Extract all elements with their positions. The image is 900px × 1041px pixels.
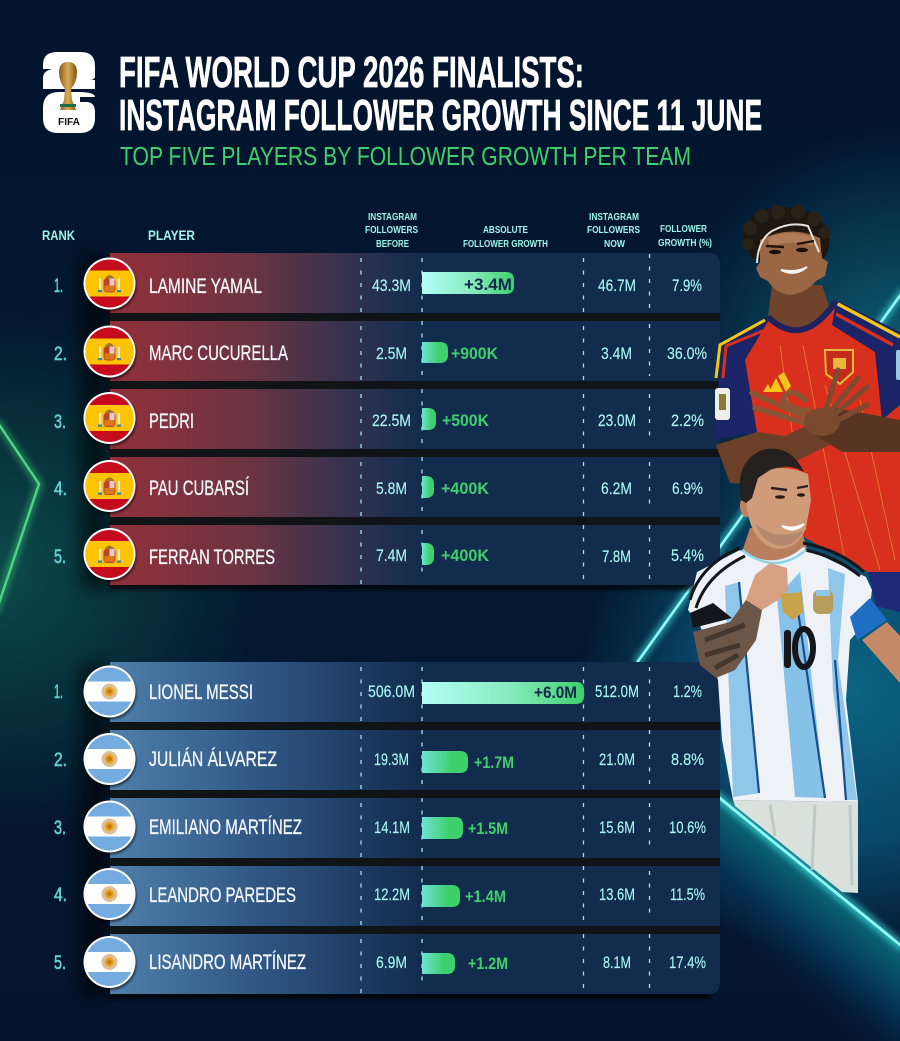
column headers: FOLLOWER [660, 224, 708, 235]
column headers: FOLLOWER GROWTH [463, 239, 548, 250]
row: Lamine Yamal: 1. [54, 275, 63, 297]
row: Lisandro Martínez: 17.4% [669, 953, 706, 972]
row: Leandro Paredes: +1.4M [465, 887, 506, 906]
row: Lisandro Martínez [54, 934, 720, 994]
row: Emiliano Martínez: 14.1M [374, 818, 410, 837]
neon line upper right [636, 290, 900, 664]
row: Leandro Paredes: LEANDRO PAREDES [149, 884, 296, 907]
column headers: NOW [604, 239, 625, 250]
row: Ferran Torres: FERRAN TORRES [149, 546, 275, 569]
row: Julián Álvarez: 2. [54, 749, 67, 771]
row: Pau Cubarsí: PAU CUBARSÍ [149, 477, 249, 500]
row: Lamine Yamal [54, 253, 720, 313]
row: Ferran Torres: 7.8M [602, 547, 631, 566]
row: Lionel Messi: 512.0M [595, 682, 639, 701]
row: Julián Álvarez: 19.3M [374, 750, 409, 769]
row: Pedri: 3. [54, 411, 66, 433]
column headers: INSTAGRAM [368, 212, 417, 223]
row: Lisandro Martínez: 6.9M [376, 953, 407, 972]
row: Ferran Torres: 5. [54, 546, 66, 568]
row: Pedri: 2.2% [671, 411, 704, 430]
column headers [42, 212, 712, 250]
row: Lisandro Martínez: LISANDRO MARTÍNEZ [149, 951, 306, 974]
row: Marc Cucurella: 3.4M [601, 344, 632, 363]
row: Marc Cucurella [54, 321, 720, 381]
player: Lionel Messi [688, 449, 900, 893]
panel: Spain table [54, 253, 720, 590]
row: Lionel Messi: 1. [54, 681, 63, 703]
column headers: FOLLOWERS [587, 225, 640, 236]
row: Lionel Messi: LIONEL MESSI [149, 681, 253, 704]
row: Pedri: 23.0M [598, 411, 636, 430]
row: Julián Álvarez: JULIÁN ÁLVAREZ [149, 748, 277, 771]
row: Pau Cubarsí [54, 457, 720, 517]
row: Julián Álvarez [54, 730, 720, 790]
column headers: PLAYER [148, 228, 195, 243]
row: Lamine Yamal: +3.4M [464, 275, 512, 294]
row: Marc Cucurella: +900K [451, 344, 499, 363]
row: Marc Cucurella: 36.0% [667, 344, 707, 363]
row: Pau Cubarsí: 6.9% [672, 479, 703, 498]
column headers: GROWTH (%) [658, 238, 712, 249]
row: Emiliano Martínez: +1.5M [468, 819, 508, 838]
row: Ferran Torres: 5.4% [671, 546, 704, 565]
row: Ferran Torres [54, 525, 720, 585]
logo: FIFA World Cup 26 [43, 52, 95, 133]
row: Ferran Torres: +400K [441, 546, 490, 565]
row: Emiliano Martínez: 10.6% [669, 818, 706, 837]
row: Lionel Messi: 506.0M [368, 682, 415, 701]
row: Leandro Paredes: 4. [54, 884, 67, 906]
row: Emiliano Martínez: EMILIANO MARTÍNEZ [149, 816, 302, 839]
column headers: FOLLOWERS [365, 225, 418, 236]
row: Lionel Messi: 1.2% [673, 682, 702, 701]
player: Lamine Yamal [712, 205, 900, 612]
row: Ferran Torres: 7.4M [376, 546, 407, 565]
row: Pau Cubarsí: 5.8M [376, 479, 407, 498]
row: Pau Cubarsí: +400K [441, 479, 490, 498]
row: Marc Cucurella: 2. [54, 343, 67, 365]
neon chevron left [0, 420, 39, 612]
row: Leandro Paredes: 12.2M [374, 885, 410, 904]
title [119, 48, 762, 140]
row: Emiliano Martínez: 15.6M [599, 818, 635, 837]
row: Pedri: +500K [442, 411, 490, 430]
row: Julián Álvarez: 8.8% [671, 750, 704, 769]
row: Pedri: 22.5M [372, 411, 411, 430]
row: Lisandro Martínez: 5. [54, 952, 66, 974]
row: Lisandro Martínez: +1.2M [468, 954, 508, 973]
neon line lower right [716, 795, 900, 948]
row: Lamine Yamal: 46.7M [598, 276, 636, 295]
column headers: RANK [42, 228, 75, 243]
row: Julián Álvarez: 21.0M [599, 750, 635, 769]
title: FIFA WORLD CUP 2026 FINALISTS: [119, 48, 584, 97]
column headers: BEFORE [376, 239, 409, 250]
row: Julián Álvarez: +1.7M [474, 753, 514, 772]
row: Lamine Yamal: 7.9% [672, 276, 702, 295]
row: Emiliano Martínez [54, 798, 720, 858]
row: Pau Cubarsí: 6.2M [601, 479, 632, 498]
subtitle: TOP FIVE PLAYERS BY FOLLOWER GROWTH PER TEAM [120, 141, 691, 171]
column headers: INSTAGRAM [589, 212, 639, 223]
row: Lisandro Martínez: 8.1M [603, 953, 631, 972]
row: Leandro Paredes: 13.6M [599, 885, 635, 904]
logo wordmark: FIFA [58, 117, 80, 128]
row: Lionel Messi [54, 662, 720, 722]
row: Pedri: PEDRI [149, 410, 194, 433]
row: Emiliano Martínez: 3. [54, 817, 66, 839]
row: Pau Cubarsí: 4. [54, 478, 67, 500]
row: Marc Cucurella: MARC CUCURELLA [149, 342, 288, 365]
column headers: ABSOLUTE [483, 225, 528, 236]
row: Lionel Messi: +6.0M [534, 683, 577, 702]
panel: Argentina table [54, 662, 720, 999]
row: Leandro Paredes: 11.5% [670, 885, 705, 904]
row: Marc Cucurella: 2.5M [376, 344, 407, 363]
row: Lamine Yamal: LAMINE YAMAL [149, 275, 262, 298]
row: Pedri [54, 389, 720, 449]
row: Leandro Paredes [54, 866, 720, 926]
row: Lamine Yamal: 43.3M [372, 276, 411, 295]
